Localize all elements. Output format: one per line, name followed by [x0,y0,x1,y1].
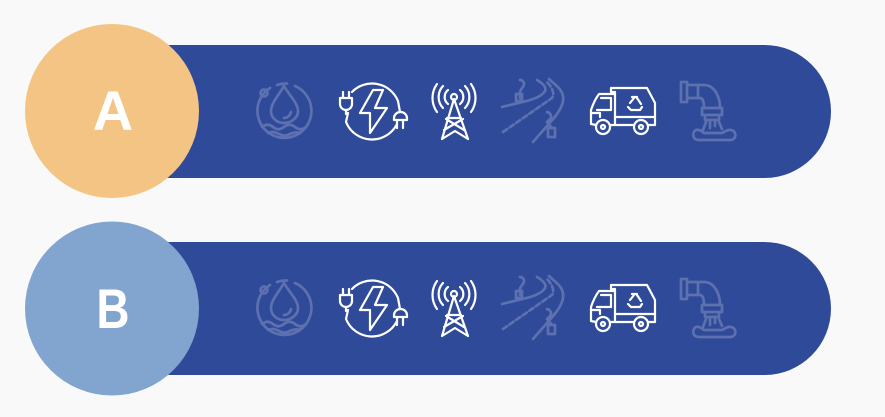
icon: sewer pipe [681,279,735,337]
icon: electricity plug [340,84,407,139]
icon: sewer pipe [681,82,735,140]
icon: road [502,276,563,339]
icon: telecom tower [432,281,476,336]
circle B with letter [25,222,199,396]
circle A with letter [25,24,199,198]
icon: garbage truck [591,88,655,134]
icon: electricity plug [340,281,407,336]
row B [25,222,831,396]
bar B [100,242,831,375]
icon: garbage truck [591,285,655,331]
circle B with letter: B [96,278,130,340]
icon: water drop [257,83,311,138]
icon: road [502,79,563,142]
icon: water drop [257,280,311,335]
circle A with letter: A [93,79,133,142]
row A [25,24,831,198]
bar A [100,45,831,178]
icon: telecom tower [432,84,476,139]
